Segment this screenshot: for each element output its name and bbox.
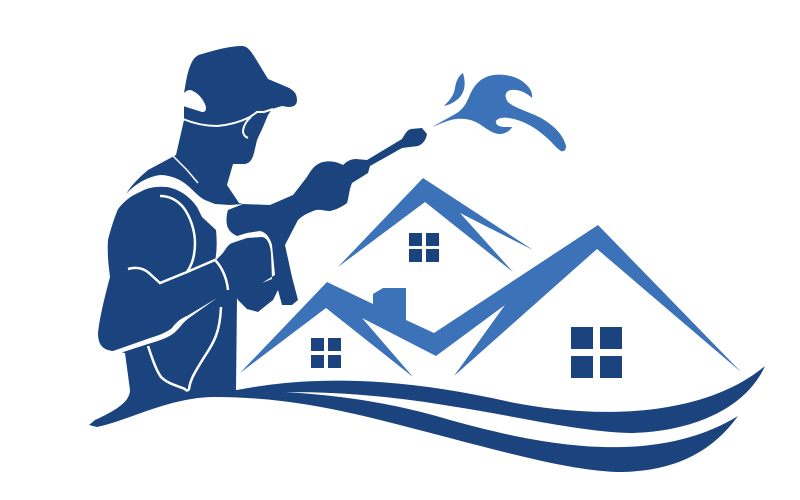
worker silhouette with wave base (89, 46, 765, 472)
water splash (432, 75, 566, 151)
forearm top line (128, 260, 228, 290)
house roof: top (338, 178, 533, 272)
vest lower line (148, 307, 221, 390)
worker body and pressure washer wand (89, 46, 765, 472)
house roof: lower left and right with chimney (240, 225, 741, 377)
glasses arm (243, 117, 251, 138)
white vest strap and gap by the hand (105, 175, 275, 283)
cap strap line (183, 109, 273, 126)
water droplet (444, 73, 465, 106)
window: left house (311, 338, 341, 368)
arm crease line (160, 196, 195, 272)
window: top house (409, 233, 439, 262)
collar line (173, 156, 198, 183)
water spray (432, 73, 566, 151)
ear opening (183, 90, 206, 112)
forearm bottom line (113, 298, 217, 354)
window: right house (571, 327, 622, 378)
